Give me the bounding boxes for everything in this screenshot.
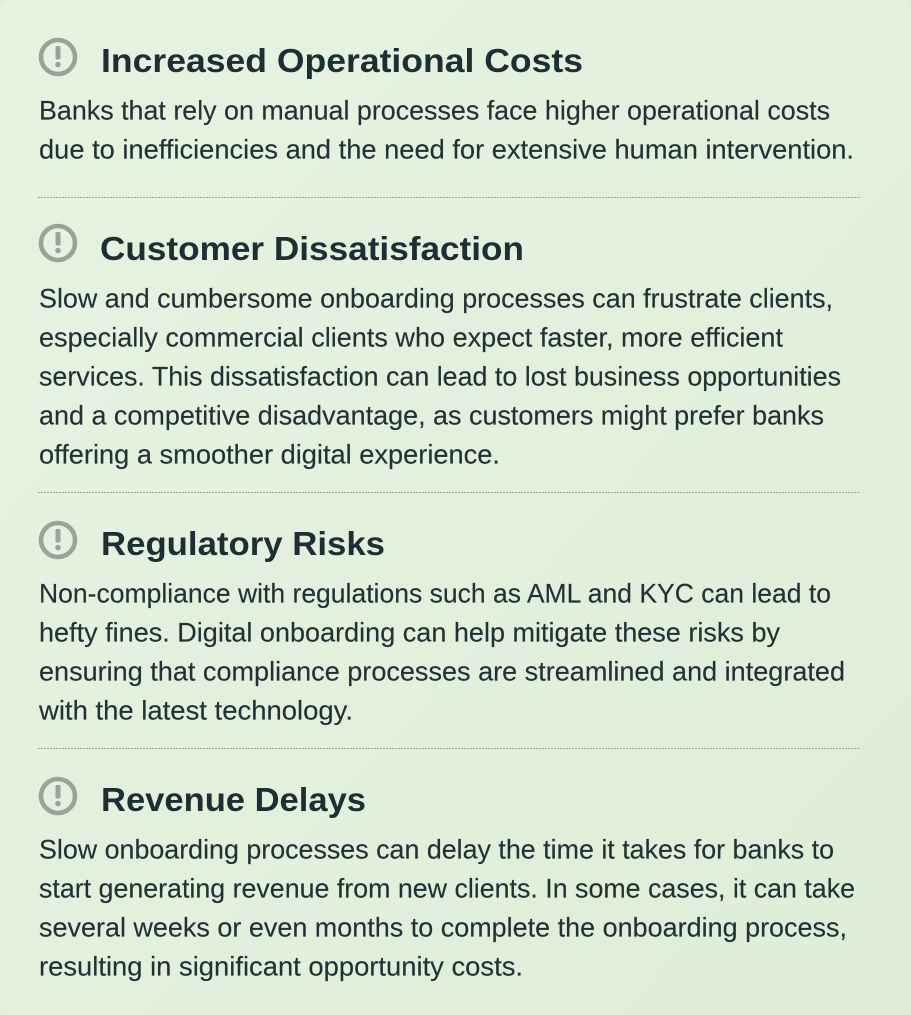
- icon: alert circle: [41, 226, 75, 260]
- heading: Customer Dissatisfaction: Customer Dissatisfaction: [100, 230, 524, 267]
- section: Regulatory Risks: [38, 523, 845, 726]
- section: Increased Operational Costs: [39, 40, 854, 164]
- text block: customer dissatisfaction description: services. This dissatisfaction can lead to lost business opportunities: [39, 362, 841, 392]
- text block: customer dissatisfaction description: and a competitive disadvantage, as customers might prefer banks: [39, 400, 824, 430]
- text block: revenue delays description: resulting in significant opportunity costs.: [39, 952, 523, 982]
- section: Revenue Delays: [39, 779, 855, 982]
- heading: Regulatory Risks: Regulatory Risks: [101, 525, 385, 562]
- text block: revenue delays description: start generating revenue from new clients. In some cases, it can take: [39, 874, 855, 904]
- section: Customer Dissatisfaction: [39, 226, 841, 470]
- icon: alert circle: [41, 523, 75, 557]
- text block: customer dissatisfaction description: [39, 284, 841, 470]
- heading: Revenue Delays: Revenue Delays: [101, 781, 366, 818]
- heading: Increased Operational Costs: Increased Operational Costs: [101, 42, 583, 79]
- text block: revenue delays description: several weeks or even months to complete the onboarding process,: [39, 912, 847, 942]
- text block: operational costs description: [39, 96, 854, 164]
- text block: regulatory risks description: [38, 578, 845, 726]
- text block: regulatory risks description: with the latest technology.: [38, 696, 353, 726]
- text block: revenue delays description: Slow onboarding processes can delay the time it takes for banks to: [39, 834, 834, 864]
- text block: regulatory risks description: hefty fines. Digital onboarding can help mitigate these risks by: [39, 618, 781, 648]
- text block: operational costs description: Banks that rely on manual processes face higher operational costs: [39, 96, 830, 126]
- text block: operational costs description: due to inefficiencies and the need for extensive human intervention.: [39, 134, 854, 164]
- text block: regulatory risks description: Non-compliance with regulations such as AML and KYC can lead to: [39, 578, 831, 608]
- text block: regulatory risks description: ensuring that compliance processes are streamlined and integrated: [39, 656, 845, 686]
- text block: revenue delays description: [39, 834, 855, 982]
- text block: customer dissatisfaction description: offering a smoother digital experience.: [39, 440, 500, 470]
- icon: alert circle: [41, 40, 75, 74]
- text block: customer dissatisfaction description: especially commercial clients who expect faster, more efficient: [39, 322, 784, 352]
- text block: customer dissatisfaction description: Slow and cumbersome onboarding processes can frustrate clients,: [39, 284, 833, 314]
- icon: alert circle: [41, 779, 75, 813]
